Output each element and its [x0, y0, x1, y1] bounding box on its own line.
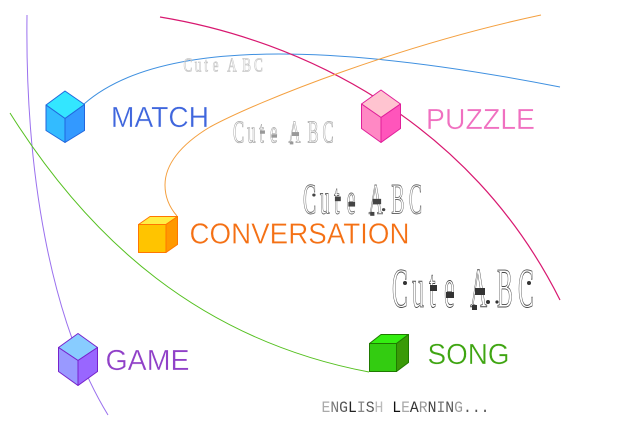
- icon: orange cube: [138, 216, 178, 252]
- item: song: [370, 334, 510, 372]
- item: conversation: [138, 216, 410, 252]
- label: CONVERSATION: CONVERSATION: [190, 218, 410, 250]
- curve: pink: [160, 17, 560, 300]
- item: match: [46, 91, 209, 142]
- label: SONG: SONG: [428, 339, 510, 371]
- icon: pink cube: [362, 90, 400, 142]
- curve: orange: [165, 15, 541, 216]
- curve: green: [10, 113, 369, 372]
- item: game: [58, 334, 190, 386]
- curve: blue: [84, 54, 560, 104]
- label: MATCH: MATCH: [111, 102, 209, 134]
- label: PUZZLE: PUZZLE: [426, 104, 535, 136]
- decorative text: Cute ABC, light: Cute ABC: [233, 117, 334, 150]
- icon: purple cube: [58, 334, 98, 386]
- item: puzzle: [362, 90, 535, 142]
- caption: English learning: ENGLISH LEARNING...: [322, 399, 490, 417]
- curve: purple: [27, 15, 108, 415]
- decorative text: Cute ABC, darkest: Cute ABC: [392, 259, 534, 320]
- decorative text: Cute ABC, faintest: Cute ABC: [184, 54, 263, 76]
- decorative text: Cute ABC, medium: Cute ABC: [303, 176, 422, 224]
- icon: green cube: [370, 334, 408, 372]
- label: GAME: GAME: [106, 345, 190, 377]
- icon: blue cube: [46, 91, 84, 142]
